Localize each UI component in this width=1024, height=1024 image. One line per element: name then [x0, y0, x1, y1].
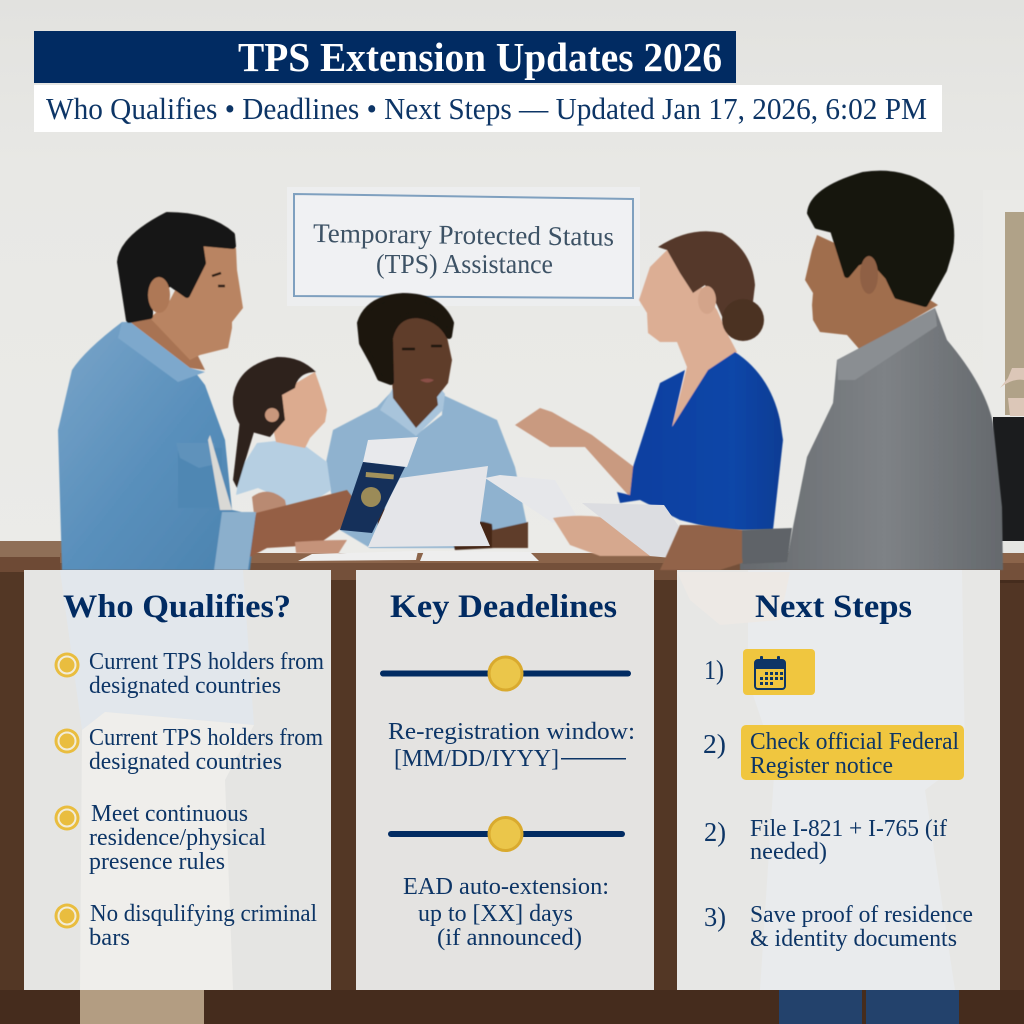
step 4: save proof: Save proof of residence — [750, 902, 973, 928]
braid — [233, 420, 254, 488]
raised arm — [515, 408, 634, 497]
person: woman in blue blouse — [515, 231, 783, 556]
hair — [658, 231, 755, 330]
wall sign — [287, 187, 640, 306]
item 3: presence rules — [89, 849, 225, 875]
door frame at right — [983, 190, 1024, 425]
neck — [130, 318, 205, 370]
hair — [810, 174, 951, 304]
item 1: Current TPS holders from — [89, 649, 324, 675]
item 2: Current TPS holders from — [89, 725, 323, 751]
step 2 highlighted — [703, 725, 964, 780]
step 1 with calendar: 1) — [704, 655, 724, 685]
title banner: TPS Extension Updates 2026 — [238, 34, 722, 80]
text: re-registration window: Re-registration window: — [388, 719, 635, 745]
step 2 highlighted: 2) — [703, 729, 726, 759]
step 4: save proof: 3) — [704, 902, 726, 932]
ear — [148, 277, 170, 313]
title banner — [34, 31, 736, 83]
person: child with braid — [233, 357, 331, 520]
text: EAD auto-extension: (if announced) — [437, 925, 582, 951]
hands — [447, 521, 494, 550]
counter — [0, 541, 1024, 1024]
collar — [380, 388, 445, 436]
text: EAD auto-extension: up to [XX] days — [418, 901, 573, 927]
item 4: No disqulifying criminal — [90, 901, 317, 927]
neck and face — [390, 315, 452, 428]
item 2: designated countries — [89, 749, 282, 775]
text: re-registration window: [MM/DD/IYYY] — [394, 746, 559, 772]
step 3: file forms — [704, 816, 947, 865]
text: re-registration window — [388, 719, 635, 772]
item 1: designated countries — [89, 673, 281, 699]
step 2 highlighted: Register notice — [750, 753, 893, 779]
arm — [252, 492, 288, 514]
person: woman in light denim shirt — [325, 296, 528, 550]
neck and face — [805, 235, 938, 350]
heading: who qualifies: Who Qualifies? — [63, 589, 291, 625]
text: EAD auto-extension: EAD auto-extension: — [403, 874, 609, 900]
item 1 — [54, 649, 324, 699]
shirt — [325, 390, 528, 548]
text: EAD auto-extension — [403, 874, 609, 951]
item 3: residence/physical — [89, 825, 266, 851]
item 4 — [54, 901, 317, 951]
dress — [236, 440, 331, 520]
document on counter — [298, 551, 539, 561]
background: office wall — [0, 0, 1024, 560]
panel: who qualifies — [24, 570, 331, 990]
hair — [360, 296, 451, 382]
subtitle banner: Who Qualifies • Deadlines • Next Steps — Updated Jan 17, 2026, 6:02 PM — [46, 91, 927, 126]
step 3: file forms: File I-821 + I-765 (if — [750, 816, 947, 842]
step 4: save proof — [704, 902, 973, 952]
neck and face — [639, 250, 737, 427]
panel: key deadlines — [356, 570, 654, 990]
hair — [120, 215, 233, 320]
icon: calendar — [755, 656, 785, 689]
hand — [660, 525, 742, 570]
step 3: file forms: 2) — [704, 817, 726, 847]
panel: next steps — [677, 570, 1000, 990]
person: man in gray shirt — [660, 174, 1003, 570]
step 1 with calendar — [704, 649, 815, 695]
item 3 — [54, 801, 266, 875]
sleeve — [738, 528, 792, 564]
heading: next steps: Next Steps — [755, 589, 912, 625]
person: man in denim shirt — [58, 215, 357, 570]
blouse — [617, 352, 783, 530]
passport and papers held by family — [340, 437, 576, 547]
ear — [860, 256, 878, 294]
wall sign: Temporary Protected Status — [313, 218, 614, 252]
item 3: Meet continuous — [91, 801, 248, 827]
hair — [233, 357, 316, 437]
item 2 — [54, 725, 323, 775]
wall sign: (TPS) Assistance — [376, 249, 553, 279]
step 3: file forms: needed) — [750, 839, 827, 865]
hair bun — [722, 299, 764, 341]
face — [267, 372, 327, 448]
slider: re-registration — [380, 657, 631, 690]
step 2 highlighted: Check official Federal — [750, 729, 959, 755]
monitor on the right — [993, 417, 1024, 557]
arm and hand — [250, 490, 357, 557]
lower hand — [553, 516, 680, 556]
slider: EAD — [388, 818, 625, 850]
item 4: bars — [89, 925, 130, 951]
step 4: save proof: & identity documents — [750, 926, 957, 952]
shirt — [58, 322, 256, 570]
face — [150, 243, 243, 360]
trousers below the panels — [80, 988, 959, 1024]
paper held by woman in blue — [582, 503, 703, 561]
heading: key deadlines: Key Deadelines — [390, 589, 617, 625]
shirt — [740, 308, 1003, 570]
